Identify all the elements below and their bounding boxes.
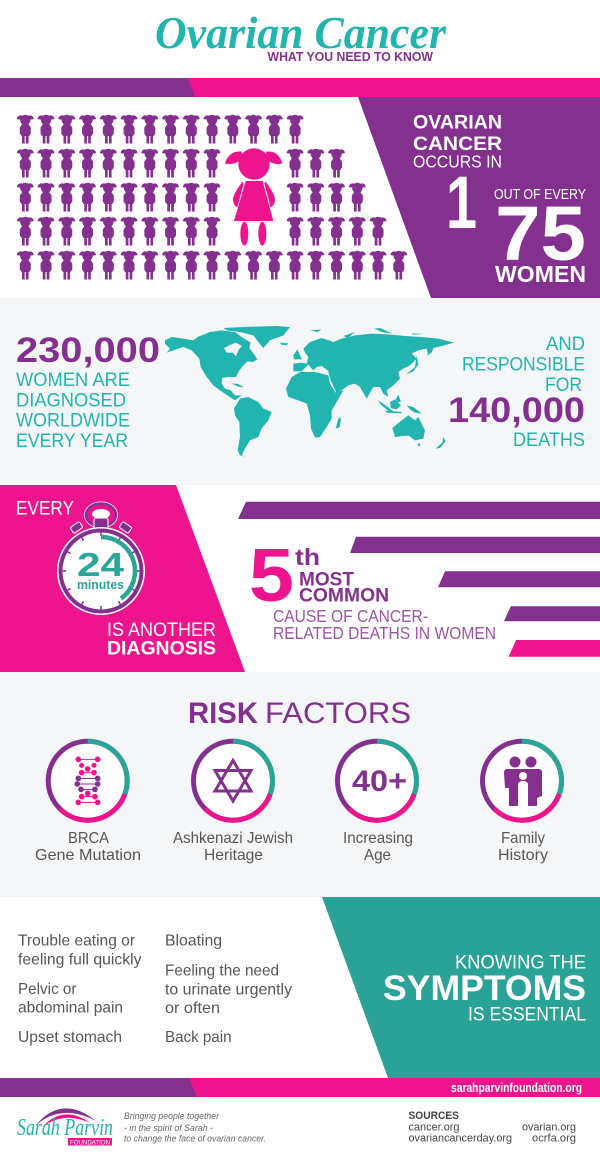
text block: 230,000 women: EVERY YEAR (16, 431, 128, 452)
text block: symptoms list left: Pelvic or (18, 981, 77, 998)
heading: risk factors (188, 697, 411, 730)
title: Ovarian Cancer (155, 7, 447, 58)
panel: every 24 minutes: EVERY (16, 499, 74, 520)
icon: DNA helix (75, 757, 100, 805)
text block: tagline: - in the spirit of Sarah - (124, 1123, 213, 1134)
text block: symptoms list right (165, 933, 292, 1046)
panel: every 24 minutes: IS ANOTHER (107, 620, 216, 641)
text block: 140,000 deaths: RESPONSIBLE (462, 354, 585, 376)
title: WHAT YOU NEED TO KNOW (268, 50, 433, 64)
text block: sources (408, 1110, 576, 1145)
text block: 230,000 women (16, 331, 160, 452)
panel: knowing the symptoms: IS ESSENTIAL (468, 1005, 586, 1026)
risk factor: Ashkenazi Jewish heritage: Ashkenazi Jewish (173, 830, 293, 847)
chart: world map (165, 326, 454, 457)
bottom ribbon (0, 1078, 600, 1097)
text block: tagline: to change the face of ovarian cancer. (124, 1134, 266, 1145)
text block: sources: SOURCES (408, 1110, 459, 1122)
text block: 5th most common: RELATED DEATHS IN WOMEN (273, 623, 496, 643)
pictogram: grid of small girls (17, 115, 407, 280)
text block: 140,000 deaths: AND (546, 334, 585, 355)
risk factor: family history: History (498, 847, 548, 864)
icon: stopwatch: minutes (77, 578, 124, 592)
text block: 230,000 women: WORLDWIDE (16, 411, 130, 432)
risk factor: increasing age: 40+ (352, 765, 407, 798)
logo: Sarah Parvin Foundation: Sarah Parvin (17, 1115, 113, 1141)
text block: 5th most common: 5 (249, 533, 294, 617)
heading: risk factors: RISK (188, 697, 258, 730)
text block: symptoms list left (18, 933, 142, 1046)
text block: 140,000 deaths: DEATHS (513, 430, 585, 451)
text block: sources: ocrfa.org (532, 1133, 576, 1145)
text block: symptoms list right: Back pain (165, 1029, 232, 1046)
top ribbon (0, 78, 600, 97)
panel: risk factors background (0, 672, 600, 897)
text block: sources: ovarian.org (522, 1122, 576, 1134)
text block: 230,000 women: DIAGNOSED (16, 390, 126, 412)
text block: sources: ovariancancerday.org (408, 1133, 512, 1145)
text block: 5th most common (249, 533, 496, 643)
text block: 140,000 deaths: 140,000 (448, 391, 585, 430)
logo: Sarah Parvin Foundation: FOUNDATION (70, 1140, 110, 1146)
risk factor: BRCA gene mutation: BRCA (68, 830, 109, 847)
risk factor: increasing age: Age (364, 847, 391, 864)
text block: symptoms list left: feeling full quickly (18, 952, 142, 969)
text block: 5th most common: COMMON (299, 586, 389, 607)
text block: sources: cancer.org (408, 1122, 460, 1134)
panel: 1 in 75 statistic: OCCURS IN (413, 152, 502, 172)
icon: stopwatch (57, 502, 145, 615)
text block: tagline: Bringing people together (124, 1111, 220, 1122)
text block: 230,000 women: 230,000 (16, 331, 160, 370)
icon: star of David (215, 760, 251, 801)
risk factor: Ashkenazi Jewish heritage: Heritage (204, 847, 263, 864)
icon: stopwatch: 24 (77, 546, 125, 583)
panel: knowing the symptoms (322, 897, 600, 1078)
icon: large pink girl (225, 148, 282, 246)
text block: symptoms list right: Feeling the need (165, 963, 279, 980)
text block: symptoms list right: or often (165, 1000, 220, 1017)
risk factor: BRCA gene mutation (35, 741, 141, 864)
text block: tagline (124, 1111, 266, 1145)
panel: 1 in 75 statistic (358, 97, 600, 298)
icon: family (504, 756, 542, 806)
text block: 140,000 deaths (448, 334, 585, 451)
text block: 5th most common: th (295, 544, 320, 570)
panel: knowing the symptoms: KNOWING THE (455, 953, 586, 974)
risk factor: Ashkenazi Jewish heritage (173, 741, 293, 864)
logo: Sarah Parvin Foundation (17, 1108, 113, 1146)
panel: 1 in 75 statistic: 75 (495, 191, 586, 277)
text block: symptoms list left: Upset stomach (18, 1029, 122, 1046)
panel: 1 in 75 statistic: CANCER (413, 133, 502, 155)
text block: 140,000 deaths: FOR (545, 375, 582, 396)
panel: 1 in 75 statistic: 1 (446, 161, 477, 244)
text block: 5th most common: MOST (299, 570, 354, 591)
text block: symptoms list right: to urinate urgently (165, 981, 292, 998)
panel: knowing the symptoms: SYMPTOMS (383, 969, 586, 1008)
text block: 5th most common: CAUSE OF CANCER- (273, 606, 428, 626)
chart: decorative ranking bars (238, 502, 600, 657)
panel: 1 in 75 statistic: OVARIAN (413, 112, 502, 134)
risk factor: family history (482, 741, 562, 864)
panel: worldwide statistics background (0, 298, 600, 485)
panel: every 24 minutes: DIAGNOSIS (107, 639, 216, 660)
risk factor: increasing age: Increasing (343, 830, 413, 847)
panel: 1 in 75 statistic: WOMEN (495, 261, 586, 287)
risk factor: family history: Family (501, 830, 545, 847)
text block: symptoms list right: Bloating (165, 933, 222, 950)
risk factor: increasing age (338, 741, 416, 864)
text block: symptoms list left: Trouble eating or (18, 933, 136, 950)
heading: risk factors: FACTORS (265, 697, 411, 730)
text block: 230,000 women: WOMEN ARE (16, 370, 130, 391)
text block: symptoms list left: abdominal pain (18, 1000, 123, 1017)
risk factor: BRCA gene mutation: Gene Mutation (35, 847, 141, 864)
panel: every 24 minutes (0, 485, 245, 672)
